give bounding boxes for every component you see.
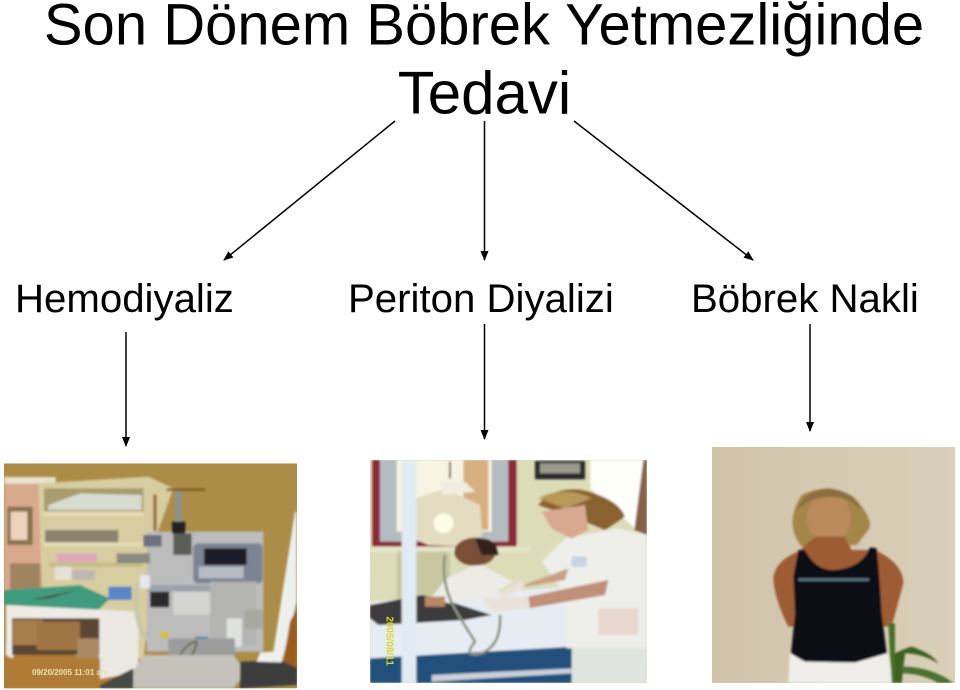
label: Böbrek Nakli: Böbrek Nakli <box>691 276 919 321</box>
title: Tedavi <box>398 60 571 126</box>
label: Periton Diyalizi: Periton Diyalizi <box>348 276 614 321</box>
photo date stamp: 2005/08/11 <box>384 616 395 666</box>
photo date stamp: hemodialysis: 09/20/2005 11:01 am <box>32 668 108 677</box>
photo: hemodialysis machine <box>4 463 297 688</box>
photo: peritoneal dialysis nurse and child <box>370 460 647 683</box>
label: Hemodiyaliz: Hemodiyaliz <box>15 276 234 321</box>
arrow: Hemodiyaliz to photo <box>125 332 127 446</box>
title <box>44 0 924 126</box>
photo: kidney transplant patient <box>712 447 955 683</box>
arrow: title to Hemodiyaliz <box>224 121 395 260</box>
arrow: title to Periton Diyalizi <box>484 121 486 260</box>
arrow: Periton Diyalizi to photo <box>484 324 486 439</box>
arrow: title to Böbrek Nakli <box>574 121 753 260</box>
arrow: Böbrek Nakli to photo <box>809 324 811 431</box>
